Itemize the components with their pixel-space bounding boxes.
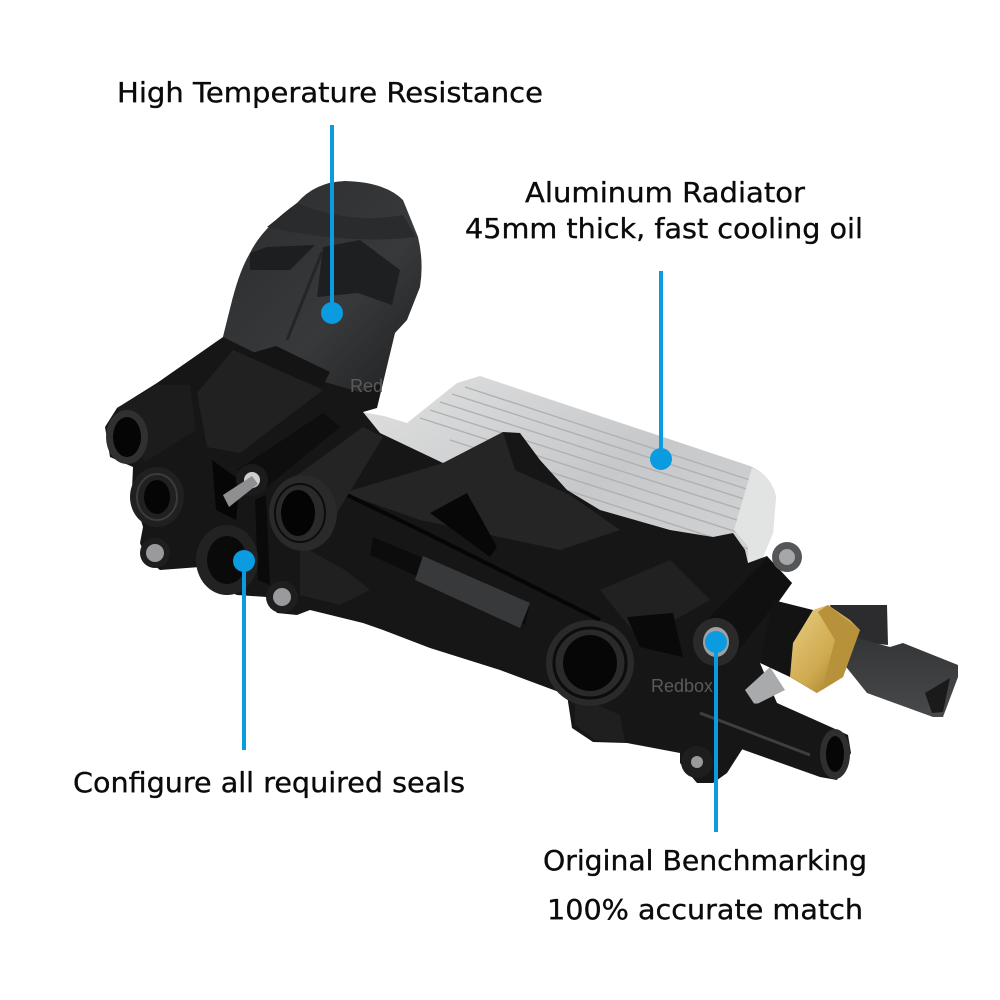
right boss tube: [693, 558, 792, 666]
subheading: accurate match: 100% accurate match: [547, 893, 863, 926]
callout: high temperature resistance: [117, 76, 543, 324]
callout: aluminum radiator: [465, 176, 863, 470]
product: oil filter housing with cooler: [105, 181, 958, 783]
watermark: Red: [350, 376, 383, 396]
heading: aluminum radiator: Aluminum Radiator: [525, 176, 806, 209]
subheading: thickness: 45mm thick, fast cooling oil: [465, 212, 863, 245]
back connector shield: [830, 605, 888, 645]
radiator: [362, 376, 776, 610]
outlet tube: [680, 667, 851, 780]
heading: seals: Configure all required seals: [73, 766, 465, 799]
heading: original benchmarking: Original Benchmarking: [543, 844, 867, 877]
main black body: [105, 297, 793, 783]
callout: original benchmarking: [543, 631, 867, 926]
filter cap: [223, 181, 422, 392]
ports: [106, 410, 634, 706]
sensor: [760, 600, 958, 717]
centre panels: [343, 432, 710, 742]
leader line: [321, 125, 343, 324]
left tube: [117, 385, 196, 462]
upper left face: [197, 350, 323, 453]
heading: high temperature resistance: High Temperature Resistance: [117, 76, 543, 109]
small tube and voids: [212, 413, 383, 605]
leader line: [650, 271, 672, 470]
watermark: [350, 376, 713, 696]
leader line: [705, 631, 727, 832]
watermark: Redbox: [651, 676, 713, 696]
leader line: [233, 550, 255, 750]
bolts: [140, 464, 802, 778]
callout: seals: [73, 550, 465, 799]
